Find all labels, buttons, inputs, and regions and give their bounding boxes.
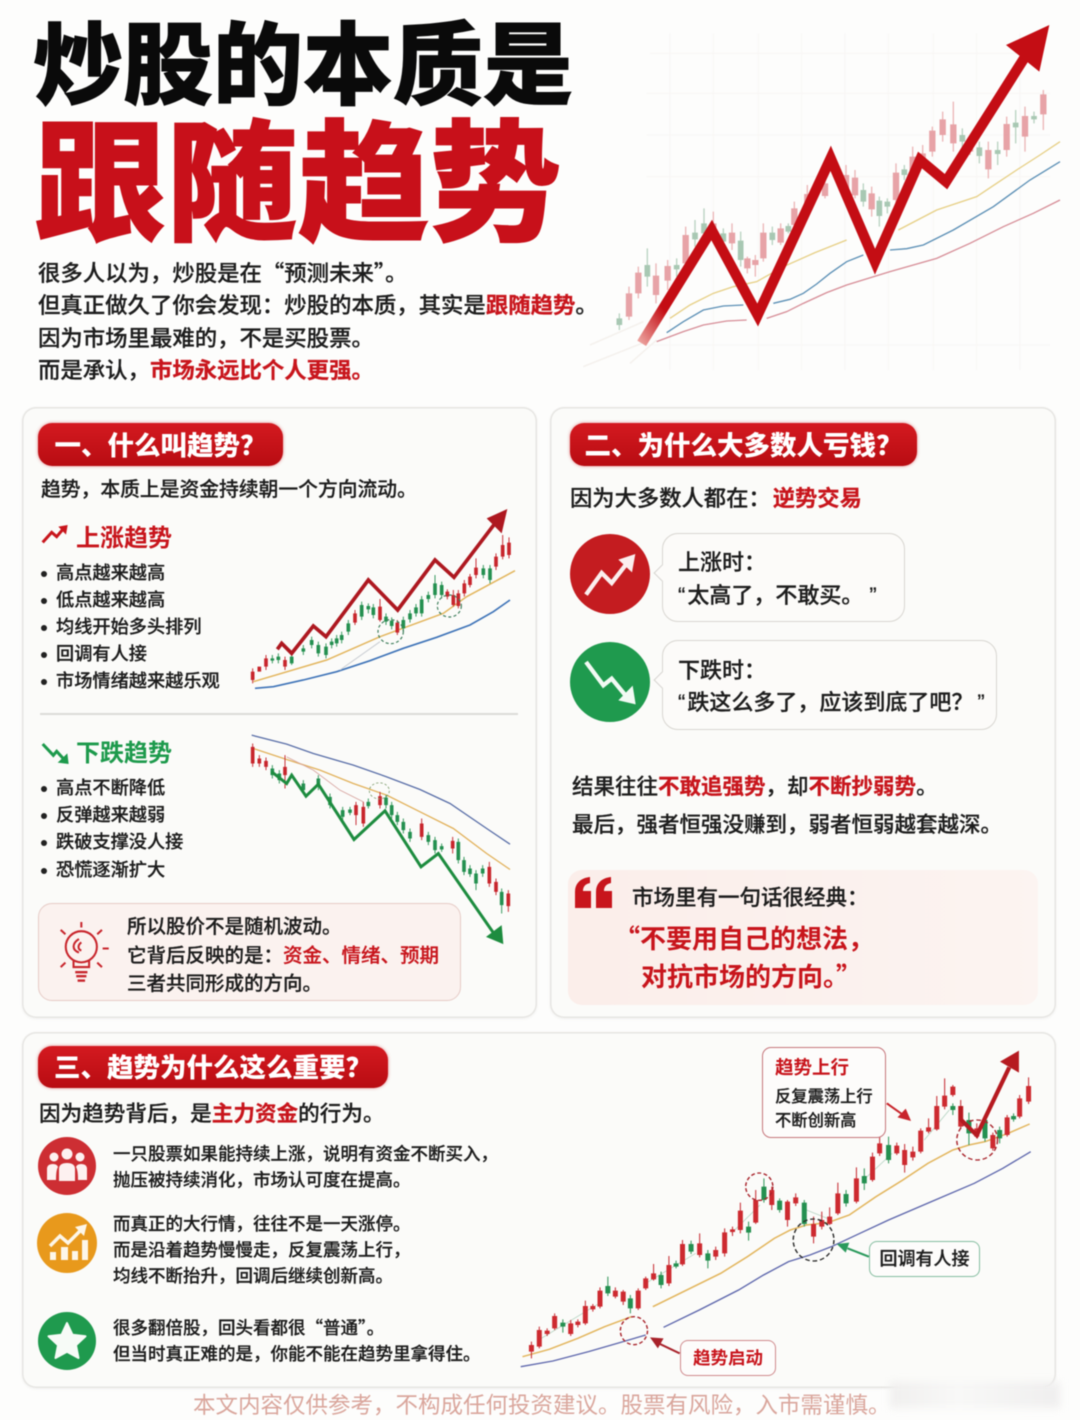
icon: red up arrow xyxy=(569,533,651,615)
intro text: 因为市场里最难的，不是买股票。 xyxy=(38,326,374,351)
text: real move: 而真正的大行情，往往不是一天涨停。 xyxy=(113,1214,410,1234)
speech bubble: falling xyxy=(662,640,997,730)
panel: why most lose money xyxy=(550,407,1056,1018)
down trend list xyxy=(40,777,184,880)
callout text: 所以股价不是随机波动。 xyxy=(127,916,342,938)
quote line two: 对抗市场的方向。” xyxy=(641,957,862,994)
icon: rising bars xyxy=(36,1212,98,1274)
speech bubble: rising: 上涨时： xyxy=(678,550,766,575)
intro text xyxy=(38,256,598,383)
text: capital xyxy=(112,1144,498,1190)
callout: trend start: 趋势启动 xyxy=(693,1348,763,1368)
icon: star xyxy=(37,1311,97,1371)
callout detail: 反复震荡上行 xyxy=(775,1088,873,1106)
callout text: 三者共同形成的方向。 xyxy=(127,973,322,995)
intro text: 但真正做久了你会发现：炒股的本质，其实是跟随趋势。 xyxy=(38,293,598,318)
speech bubble: falling: “跌这么多了，应该到底了吧？” xyxy=(678,690,985,715)
lead text: 因为趋势背后，是主力资金的行为。 xyxy=(39,1101,385,1126)
heading pill two xyxy=(570,423,917,466)
text: real move: 均线不断抬升，回调后继续创新高。 xyxy=(113,1266,393,1286)
divider xyxy=(40,713,518,714)
down trend chart xyxy=(250,734,511,945)
panel: why trend matters xyxy=(22,1032,1056,1388)
hero trend chart xyxy=(584,24,1061,367)
down trend list: 跌破支撑没人接 xyxy=(56,832,183,852)
up trend list: 回调有人接 xyxy=(56,644,147,664)
watermark smudge xyxy=(890,1382,1060,1408)
title line two: 跟随趋势 xyxy=(35,111,561,258)
panel: what is a trend xyxy=(22,407,537,1018)
callout: pullback support xyxy=(869,1241,980,1277)
text: capital: 抛压被持续消化，市场认可度在提高。 xyxy=(113,1170,410,1190)
intro text: 很多人以为，炒股是在“预测未来”。 xyxy=(38,256,407,288)
definition text: 趋势，本质上是资金持续朝一个方向流动。 xyxy=(41,479,417,501)
icon: light bulb xyxy=(60,921,110,983)
text: multi-baggers: 但当时真正难的是，你能不能在趋势里拿得住。 xyxy=(113,1344,480,1364)
text: multi-baggers xyxy=(112,1315,480,1364)
icon: up trend xyxy=(41,524,68,544)
speech bubble: falling: 下跌时： xyxy=(678,658,766,683)
icon: quote mark xyxy=(574,876,613,909)
up trend chart xyxy=(250,508,516,690)
up trend heading: 上涨趋势 xyxy=(76,525,172,552)
intro text: 而是承认，市场永远比个人更强。 xyxy=(38,358,374,383)
callout detail xyxy=(775,1086,873,1130)
callout: trend rising xyxy=(762,1047,886,1138)
heading pill two: 二、为什么大多数人亏钱？ xyxy=(584,431,902,461)
up trend list: 均线开始多头排列 xyxy=(56,617,202,637)
callout: trend start xyxy=(680,1340,776,1376)
callout text xyxy=(126,916,439,995)
down trend heading: 下跌趋势 xyxy=(76,740,172,767)
text: real move: 而是沿着趋势慢慢走，反复震荡上行， xyxy=(113,1240,410,1260)
quote box xyxy=(568,870,1038,1005)
icon: down trend xyxy=(41,742,70,765)
up trend list: 高点越来越高 xyxy=(56,563,165,583)
reason text: 因为大多数人都在：逆势交易 xyxy=(570,486,862,511)
quote line one: “不要用自己的想法， xyxy=(614,919,874,956)
callout heading: 趋势上行 xyxy=(775,1057,849,1078)
callout: pullback support: 回调有人接 xyxy=(880,1249,970,1269)
down trend list: 反弹越来越弱 xyxy=(56,805,165,825)
result text: 结果往往不敢追强势，却不断抄弱势。 xyxy=(572,775,938,799)
text: real move xyxy=(112,1214,410,1286)
heading pill three: 三、趋势为什么这么重要？ xyxy=(54,1053,372,1083)
title line one: 炒股的本质是 xyxy=(33,17,573,117)
speech bubble: rising: “太高了，不敢买。 ” xyxy=(678,583,877,608)
down trend list: 高点不断降低 xyxy=(56,778,165,798)
icon: green down arrow xyxy=(569,641,651,723)
text: capital: 一只股票如果能持续上涨，说明有资金不断买入， xyxy=(113,1144,498,1164)
result text: 最后，强者恒强没赚到，弱者恒弱越套越深。 xyxy=(572,813,1002,837)
section three candlestick chart xyxy=(520,1050,1032,1368)
heading pill one xyxy=(38,423,283,466)
down trend list: 恐慌逐渐扩大 xyxy=(56,860,165,880)
heading pill three xyxy=(38,1046,388,1088)
icon: people xyxy=(37,1136,97,1196)
up trend list: 市场情绪越来越乐观 xyxy=(56,671,220,691)
quote intro: 市场里有一句话很经典： xyxy=(632,886,869,910)
callout: reason xyxy=(38,903,461,1001)
callout text: 它背后反映的是：资金、情绪、预期 xyxy=(127,945,439,967)
callout detail: 不断创新高 xyxy=(775,1112,856,1130)
text: multi-baggers: 很多翻倍股，回头看都很“普通”。 xyxy=(113,1315,384,1340)
up trend list xyxy=(40,562,220,691)
heading pill one: 一、什么叫趋势？ xyxy=(54,431,266,461)
result text xyxy=(572,774,1002,837)
up trend list: 低点越来越高 xyxy=(56,590,165,610)
footer disclaimer: 本文内容仅供参考，不构成任何投资建议。股票有风险，入市需谨慎。 xyxy=(193,1393,891,1418)
speech bubble: rising xyxy=(662,533,905,622)
